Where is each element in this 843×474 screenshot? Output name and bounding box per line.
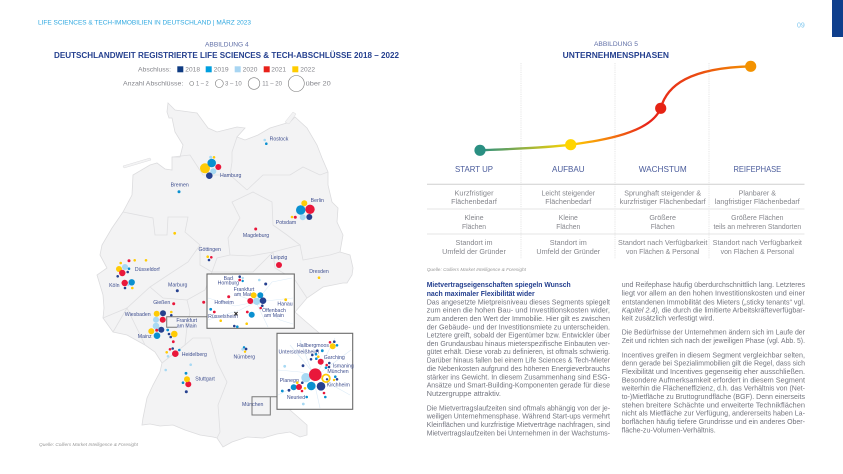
national deal bubbles (116, 139, 320, 393)
article right column: entstandenen Immobilität des Mieters („sticky tenants“ vgl. (622, 297, 805, 306)
Frankfurt inset: am Main (264, 313, 284, 319)
article left column: Ansätze und Smart-Building-Komponenten gerade für diese (427, 381, 610, 390)
article right column: denn gerade bei Spezialimmobilien gilt die Regel, dass sich (622, 359, 805, 368)
legend: deal count: über 20 (306, 81, 331, 88)
city labels: Göttingen (198, 247, 221, 253)
article left column: Letztere greift, sobald der Eigentümer bzw. Entwickler über (427, 330, 611, 340)
city labels: Gießen (153, 300, 170, 306)
city labels (109, 136, 329, 408)
phase table text (442, 188, 802, 256)
phase table grid (427, 63, 804, 259)
article right column: Besondere Aufmerksamkeit erfordert in diesem Segment (622, 375, 805, 384)
Munich inset: Kirchheim (327, 382, 350, 388)
article subheading: nach maximaler Flexibilität wider (427, 289, 535, 298)
article subheading (427, 280, 571, 298)
article left column: der Gebäude- und der Investitionsmiete zu unterscheiden. (427, 322, 610, 331)
phase table text: Sprunghaft steigender & (624, 188, 701, 198)
article left column: den Grundausbau hinaus mieterspezifische Einbauten ver- (427, 339, 611, 348)
city labels: Heidelberg (182, 352, 207, 358)
phase table text: Leicht steigender (541, 188, 596, 198)
article right column: weiterhin die Flächeneffizienz, d.h. das Verhältnis von (Net- (621, 384, 806, 393)
city labels: Mainz (138, 334, 152, 340)
legend: deal count (123, 76, 331, 92)
legend: year: 2021 (271, 66, 287, 74)
city labels: Marburg (168, 282, 187, 288)
phase table text: Planbarer & (739, 188, 776, 198)
article right column: keit zusätzlich verfestigt wird. (622, 314, 714, 323)
legend: deal count: 1 – 2 (196, 81, 209, 88)
figure 4 heading: DEUTSCHLANDWEIT REGISTRIERTE LIFE SCIENCES & TECH-ABSCHLÜSSE 2018 – 2022 (54, 50, 399, 60)
legend: year: 2020 (243, 66, 258, 74)
legend: year: 2019 (214, 66, 229, 74)
phase table text: von Flächen & Personal (626, 247, 700, 256)
article left column: Darüber hinaus fallen bei einem Life Sciences & Tech-Mieter (427, 355, 611, 364)
phase table text: Standort nach Verfügbarkeit (618, 238, 707, 247)
Frankfurt inset: Homburg (218, 280, 239, 286)
phase table text: teils an mehreren Standorten (713, 222, 801, 231)
article right column: nicht als Mietfläche zur Verfügung, andererseits haben La- (622, 409, 806, 418)
city labels: Berlin (311, 198, 324, 204)
phase table text: Flächenbedarf (545, 197, 591, 206)
article left column: Die Mietvertragslaufzeiten sind oftmals abhängig von der je- (427, 403, 611, 412)
phase table text: Kurzfristiger (454, 188, 494, 198)
article left column: Kleinflächen und kurzfristige Mietverträge nachfragen, sind (427, 420, 610, 429)
legend: year: Abschluss: (138, 66, 171, 74)
city labels: Wiesbaden (125, 312, 151, 318)
phase table text: Umfeld der Gründer (536, 247, 601, 256)
Munich inset: Unterschleißheim (279, 350, 319, 356)
Munich locator (252, 397, 277, 415)
phase table text: Flächen (651, 222, 675, 231)
phase table source: Quelle: Colliers Market Intelligence & Foresight (427, 267, 527, 273)
Frankfurt inset: Hofheim (214, 300, 234, 306)
phase table text: Umfeld der Gründer (442, 247, 506, 256)
phase table text: Flächen (462, 222, 486, 231)
article left column: gütet erhält. Diese vorab zu definieren, ist oftmals schwierig. (427, 347, 610, 356)
article left column: Nutzergruppe attraktiv. (427, 389, 501, 398)
phase labels: START UP (455, 165, 494, 174)
phase labels: REIFEPHASE (733, 165, 782, 174)
article right column: to-)Mietfläche zu Bruttogrundfläche (BGF). Denn einerseits (622, 392, 805, 401)
city labels: Düsseldorf (135, 267, 160, 273)
city labels: Dresden (309, 269, 329, 275)
article right column: Kapitel 2.4), die durch die limitierte Arbeitskräfteverfügbar- (622, 305, 806, 314)
page header: LIFE SCIENCES & TECH-IMMOBILIEN IN DEUTSCHLAND | MÄRZ 2023 (38, 18, 251, 26)
city labels: Bremen (171, 182, 189, 188)
map source: Quelle: Colliers Market Intelligence & Foresight (39, 442, 139, 448)
article subheading: Mietvertragseigenschaften spiegeln Wunsch (427, 280, 571, 289)
article right column: Zeit und richten sich nach der jeweiligen Phase (vgl. Abb. 5). (622, 336, 805, 345)
Munich inset: Garching (324, 355, 345, 361)
phase labels: AUFBAU (552, 165, 585, 174)
Frankfurt inset: Offenbach (262, 308, 286, 314)
article left column: die Nebenkosten aufgrund des höheren Energieverbrauchs (427, 364, 610, 373)
phase table text: Kleine (464, 213, 484, 222)
city labels: München (242, 402, 263, 408)
city labels: am Main (177, 324, 197, 330)
article left column: Mietvertragslaufzeiten bei Unternehmen in der Wachstums- (427, 428, 611, 437)
figure 4 heading (54, 42, 399, 60)
Munich inset: Ismaning (333, 364, 354, 370)
city labels: Leipzig (271, 255, 287, 261)
phase table text: kurzfristiger Flächenbedarf (620, 197, 706, 206)
article left column (426, 297, 611, 437)
legend: deal count: 3 – 10 (225, 81, 242, 88)
article right column: Incentives greifen in diesem Segment vergleichbar selten, (622, 350, 805, 359)
Frankfurt inset (207, 274, 294, 328)
phase table text: langfristiger Flächenbedarf (715, 197, 800, 206)
legend: year: 2018 (185, 66, 201, 74)
article right column: fläche-zu-Volumen-Verhältnis. (622, 425, 716, 434)
figure 5 heading: UNTERNEHMENSPHASEN (563, 50, 669, 60)
article right column: borflächen häufig tiefere Grundrisse und ein anderes Ober- (622, 417, 806, 426)
Frankfurt inset: Frankfurt (234, 287, 255, 293)
figure 5 heading (563, 42, 669, 60)
page number: 09 (797, 22, 805, 29)
legend: deal count: 11 – 20 (262, 81, 282, 88)
Munich inset: Neuried (287, 395, 305, 401)
Frankfurt inset: Rüsselsheim (208, 314, 238, 320)
phase table text: Standort nach Verfügbarkeit (713, 238, 802, 247)
city labels: Frankfurt (176, 318, 198, 324)
article left column: Das angesetzte Mietpreisniveau dieses Segments spiegelt (427, 297, 610, 306)
article right column: Flexibilität und Incentives gegenseitig eher ausschließen. (622, 367, 805, 376)
phase labels: WACHSTUM (639, 165, 687, 174)
legend: year (138, 66, 316, 74)
phase labels (455, 165, 782, 174)
Frankfurt inset: am Main (234, 292, 254, 298)
article left column: weiligen Unternehmensphase. Während Start-ups vermehrt (426, 412, 610, 421)
phase table text: Flächen (556, 222, 580, 231)
phase table text: Kleine (559, 213, 578, 222)
article right column: und Reifephase häufig überdurchschnittlich lang. Letzteres (622, 280, 805, 289)
city labels: Potsdam (276, 220, 296, 226)
figure 5 heading: ABBILDUNG 5 (594, 42, 639, 48)
phase table text: Standort im (456, 238, 492, 247)
Munich inset: Planegg (280, 378, 299, 384)
figure 4 heading: ABBILDUNG 4 (205, 42, 249, 48)
phase table text: Größere Flächen (731, 213, 783, 222)
city labels: Hamburg (220, 173, 241, 179)
article right column (621, 280, 806, 434)
phase table text: von Flächen & Personal (721, 247, 794, 256)
Munich inset: Hallbergmoos (297, 343, 329, 349)
growth curve (474, 61, 756, 156)
article right column: stehen breitere Schächte und erweiterte Technikflächen (622, 400, 805, 409)
article left column: stärker ins Gewicht. In diesem Zusammenhang sind ESG- (427, 372, 611, 381)
article right column: Die Bedürfnisse der Unternehmen ändern sich im Laufe der (622, 328, 806, 337)
city labels: Köln (109, 283, 120, 289)
city labels: Rostock (270, 136, 289, 142)
phase table text: Flächenbedarf (451, 197, 497, 206)
city labels: Stuttgart (195, 376, 215, 382)
city labels: Nürnberg (233, 354, 255, 360)
legend: deal count: Anzahl Abschlüsse: (123, 81, 184, 88)
map of Germany (97, 103, 353, 447)
phase table text: Standort im (550, 238, 587, 247)
article left column: zum anderen den Wert der Immobilie. Hier gilt es zwischen (427, 314, 610, 323)
Frankfurt inset: Hanau (277, 302, 293, 308)
Munich inset (277, 333, 354, 409)
Frankfurt locator (167, 317, 207, 327)
city labels: Magdeburg (243, 233, 269, 239)
legend: year: 2022 (300, 66, 316, 74)
phase table text: Größere (649, 213, 676, 222)
Munich inset: München (327, 369, 349, 375)
corner tab (832, 0, 843, 37)
article left column: zum einen die hohen Bau- und Investitionskosten wider, (427, 306, 610, 315)
Frankfurt inset: Bad (224, 276, 233, 282)
article right column: liegt vor allem an den hohen Investitionskosten und einer (622, 289, 806, 298)
